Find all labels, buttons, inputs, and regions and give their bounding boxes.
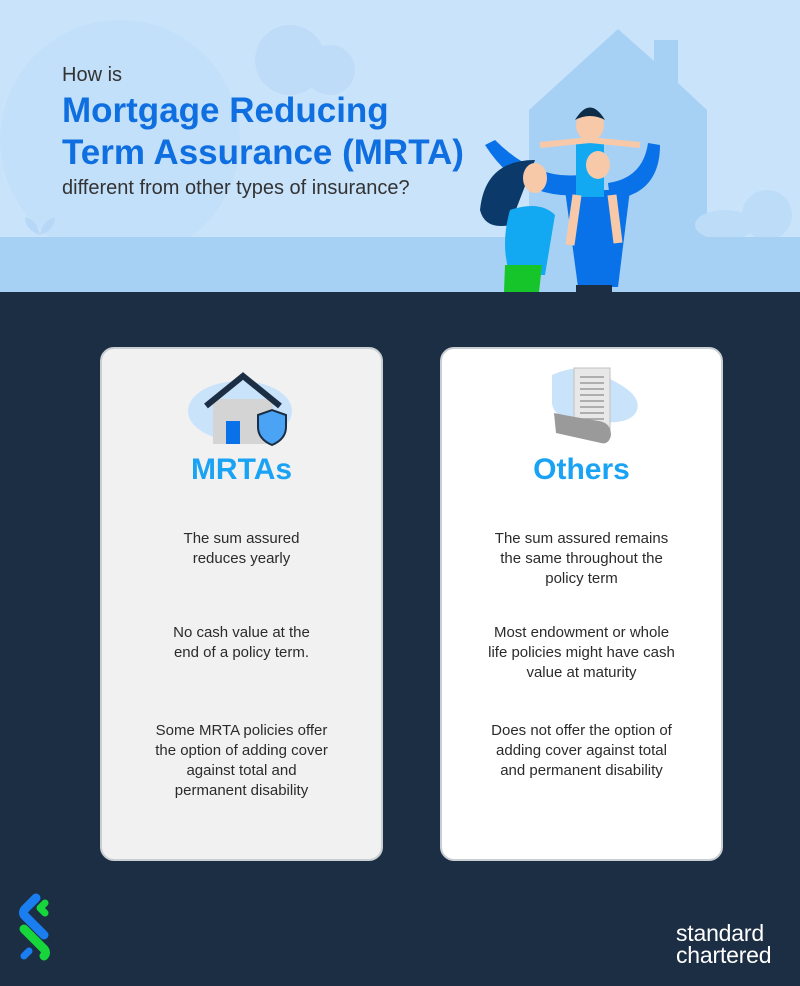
text: sum assured: policy term	[545, 570, 618, 587]
text: disability cover: adding cover against total	[496, 742, 667, 759]
title	[62, 64, 464, 199]
panel: Others	[440, 347, 723, 861]
text: cash value	[488, 624, 675, 681]
title: Mortgage Reducing	[62, 91, 389, 130]
text: cash value: value at maturity	[526, 664, 637, 681]
text: disability cover: the option of adding cover	[155, 742, 328, 759]
text: sum assured: the same throughout the	[500, 550, 663, 567]
text: disability cover: and permanent disability	[500, 762, 663, 779]
text: disability cover: against total and	[186, 762, 297, 779]
logo: standard chartered wordmark: standard	[676, 920, 764, 946]
text: sum assured	[495, 530, 668, 587]
text: cash value: Most endowment or whole	[494, 624, 669, 641]
illustration: house and family	[0, 25, 800, 292]
text: disability cover: permanent disability	[175, 782, 308, 799]
text: cash value: life policies might have cash	[488, 644, 675, 661]
text: disability cover	[491, 722, 672, 779]
text: disability cover: Does not offer the option of	[491, 722, 672, 739]
text: disability cover: Some MRTA policies offer	[156, 722, 327, 739]
text: cash value: No cash value at the	[173, 624, 310, 641]
text: sum assured: reduces yearly	[193, 550, 290, 567]
text: sum assured: The sum assured remains	[495, 530, 668, 547]
text: cash value: end of a policy term.	[174, 644, 309, 661]
title: Term Assurance (MRTA)	[62, 133, 464, 172]
text: sum assured	[184, 530, 299, 567]
text: disability cover	[155, 722, 328, 799]
icon: document scroll	[552, 368, 638, 444]
heading: MRTAs: MRTAs	[191, 453, 292, 486]
header: sky background	[0, 0, 800, 292]
logo: standard chartered wordmark: chartered	[676, 942, 771, 968]
icon: house with shield	[188, 372, 292, 446]
title: different from other types of insurance?	[62, 177, 410, 199]
text: sum assured: The sum assured	[184, 530, 299, 547]
text: cash value	[173, 624, 310, 661]
heading: Others: Others	[533, 453, 630, 486]
title: How is	[62, 64, 122, 86]
logo: standard chartered wordmark	[676, 920, 771, 968]
panel: MRTAs	[100, 347, 383, 861]
logo: Standard Chartered mark	[19, 894, 50, 960]
